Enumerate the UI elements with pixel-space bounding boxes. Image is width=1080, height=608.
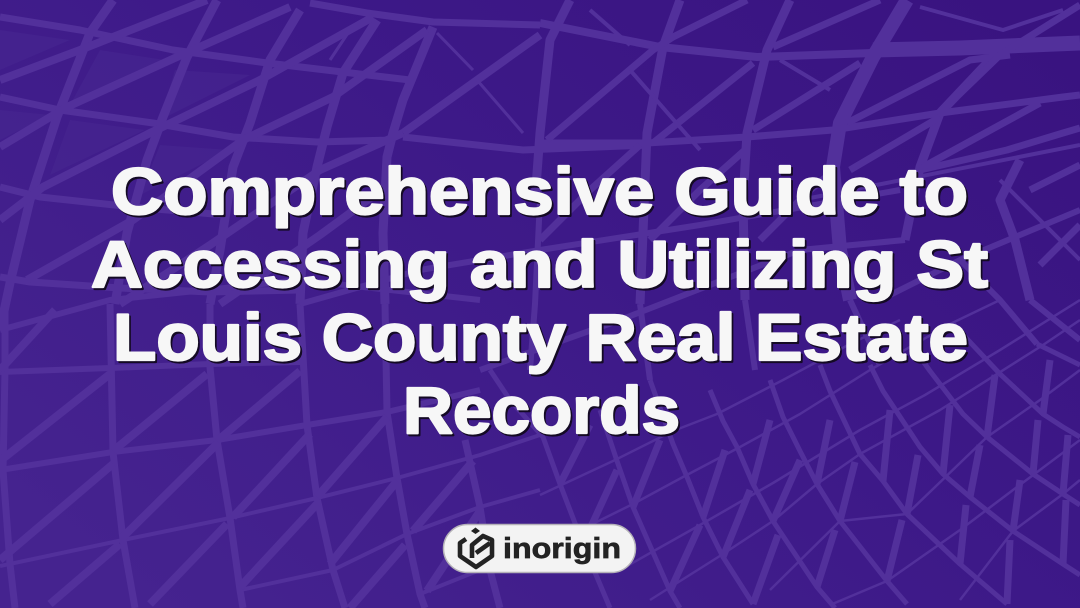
title white text — [91, 154, 988, 447]
lighter cells top left — [0, 30, 250, 195]
icon: inorigin cube mark — [460, 528, 492, 567]
title shadow layer: Louis County Real Estate — [115, 302, 970, 376]
logo wordmark: inorigin — [503, 533, 621, 565]
title white text: Comprehensive Guide to — [111, 154, 968, 228]
bottom-left: lattice rows — [0, 362, 480, 470]
title shadow layer — [93, 156, 990, 449]
middle band beams behind title — [0, 190, 1080, 380]
title shadow layer: Accessing and Utilizing St — [93, 229, 990, 303]
top-left: near vertical beams — [0, 0, 433, 330]
title shadow layer: Comprehensive Guide to — [113, 156, 970, 230]
title white text: Louis County Real Estate — [113, 300, 968, 374]
top-right: diagonal beams — [540, 0, 1080, 265]
title white text: Records — [403, 373, 680, 447]
top-left: horizontal beams — [0, 3, 650, 292]
bottom-right: thin rising lines — [540, 300, 1080, 605]
top-right: near vertical beams — [535, 0, 1030, 304]
title white text: Accessing and Utilizing St — [91, 227, 988, 301]
title shadow layer: Records — [405, 375, 682, 449]
bottom-left: lattice diagonals — [0, 310, 480, 608]
bottom-right: curved lattice arcs — [490, 324, 1080, 608]
top-right: horizontal beams — [540, 23, 873, 57]
logo pill background — [444, 524, 636, 572]
bottom-left: lattice columns — [3, 304, 500, 608]
top-left: diagonal beams — [0, 0, 540, 304]
bottom-right: spindle struts — [560, 360, 1068, 604]
